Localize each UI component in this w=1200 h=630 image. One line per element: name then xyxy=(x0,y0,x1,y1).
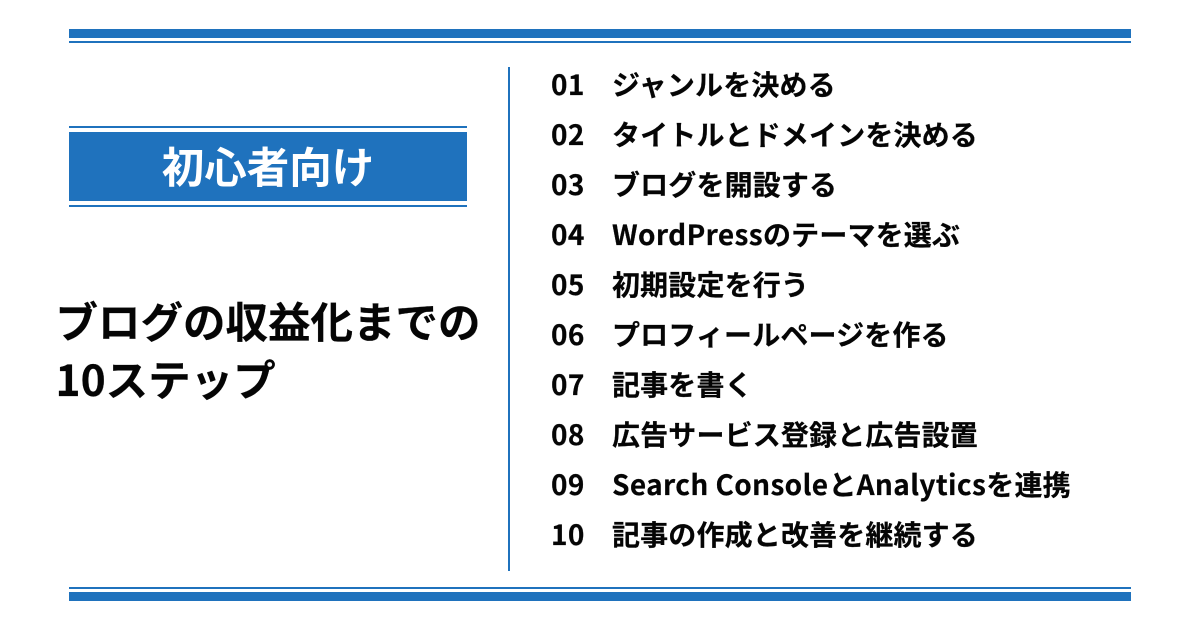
step list xyxy=(551,64,1071,554)
main title: 10ステップ xyxy=(56,348,276,409)
badge: beginner label: 初心者向け xyxy=(162,135,374,196)
step 07: 07 xyxy=(551,364,585,404)
step 06: 06 xyxy=(551,314,585,354)
badge: beginner label xyxy=(69,126,467,207)
step 09: 09 xyxy=(551,464,585,504)
step 01: 01 xyxy=(551,64,585,104)
step 05: 05 xyxy=(551,264,585,304)
step 08: 08 xyxy=(551,414,585,454)
step 10: 記事の作成と改善を継続する xyxy=(612,514,978,554)
step 02: タイトルとドメインを決める xyxy=(612,114,978,154)
main title: ブログの収益化までの xyxy=(56,290,481,351)
step 10: 10 xyxy=(551,514,585,554)
step 04: WordPressのテーマを選ぶ xyxy=(612,214,960,254)
step 05: 初期設定を行う xyxy=(612,264,809,304)
step 07: 記事を書く xyxy=(612,364,753,404)
step 04: 04 xyxy=(551,214,585,254)
step 09: Search ConsoleとAnalyticsを連携 xyxy=(612,464,1071,504)
step 02: 02 xyxy=(551,114,585,154)
top double rule xyxy=(69,29,1131,43)
main title xyxy=(56,290,481,409)
vertical divider xyxy=(508,67,510,571)
step 06: プロフィールページを作る xyxy=(612,314,949,354)
step 03: ブログを開設する xyxy=(612,164,837,204)
bottom double rule xyxy=(69,587,1131,601)
step 01: ジャンルを決める xyxy=(612,64,836,104)
step 07 xyxy=(551,364,753,404)
step 08: 広告サービス登録と広告設置 xyxy=(612,414,978,454)
step 03: 03 xyxy=(551,164,585,204)
